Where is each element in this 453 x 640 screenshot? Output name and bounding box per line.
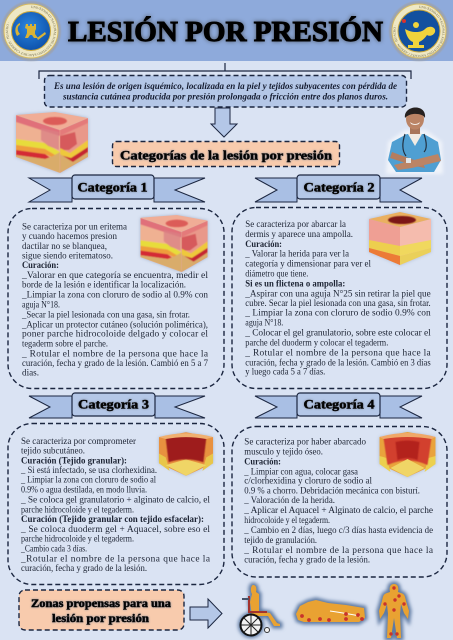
icon: skin lesion illustration	[15, 112, 89, 174]
text: categoría 3: 0.9% o agua destilada, en modo lluvia.	[21, 486, 147, 496]
ribbon: categoría 4	[255, 393, 422, 418]
text: categoría 2: _ Rotular el nombre de la persona que hace la	[244, 348, 432, 358]
text: categoría 3: parche hidrocoloide y el tegaderm.	[21, 505, 134, 515]
text: categoría 3: Se caracteriza por comprometer	[21, 437, 137, 447]
ribbon: categoría 3	[29, 393, 205, 418]
text: categoría 1	[21, 223, 209, 379]
text: categoría 2: parche del duoderm y colocar el tegaderm.	[245, 338, 388, 348]
icon: standing body with pressure points	[379, 584, 409, 638]
panel: categoría 4	[232, 393, 447, 577]
text: categoría 4: _ Aplicar el Aquacel + Alginato de calcio, el parche	[243, 506, 433, 516]
text: categoría 3: _Rotular el nombre de la persona que hace la	[20, 555, 211, 565]
panel: categoría 2	[232, 175, 447, 388]
ribbon: categoría 2	[255, 175, 422, 202]
text: categoría 1: _Aplicar un protector cutáneo (solución polimérica),	[21, 319, 208, 330]
text: categoría 4: 0.9 % a chorro. Debridación mecánica con bisturí.	[244, 487, 420, 497]
text: categoría 1: _Limpiar la zona con cloruro de sodio al 0.9% con	[21, 290, 208, 300]
logo: university crest: UNIVERSIDAD NACIONAL JOSÉ FAUSTINO SÁNCHEZ CARRIÓN · HUACHO ·	[6, 6, 56, 57]
text: categoría 4: _ Rotular el nombre de la persona que hace la	[243, 546, 434, 556]
categories heading box	[112, 142, 340, 166]
icon: skin category 2	[369, 212, 431, 265]
icon: skin category 4	[380, 432, 436, 477]
text: categoría 4: curación, fecha y grado de la lesión.	[244, 554, 370, 565]
panel: categoría 3	[8, 393, 224, 584]
text: categoría 3: _Cambio cada 3 días.	[20, 544, 87, 554]
text: categoría 1: _Secar la piel lesionada con una gasa, sin frotar.	[21, 310, 190, 321]
callout: zonas propensas: Zonas propensas para una	[31, 598, 171, 610]
callout: zonas propensas	[19, 590, 184, 630]
text: categoría 1: y cuando hacemos presion	[22, 232, 117, 242]
text: categoría 2: categoría y dimensionar para ver el	[245, 260, 371, 270]
text: categoría 4: Se caracteriza por haber abarcado	[244, 438, 366, 448]
text: categoría 3: _ Limpiar la zona con cloruro de sodio al	[20, 476, 156, 486]
text: categoría 4: _ Cambio en 2 días, luego c/3 días hasta evidencia de	[243, 526, 433, 536]
text: categoría 1: dias.	[22, 369, 39, 379]
text: categoría 1: borde de la lesión e identificar la localización.	[22, 279, 186, 290]
dashed box: categoría 2	[232, 208, 447, 388]
text: categoría 2: y luego cada 5 a 7 días.	[245, 368, 325, 378]
text: categoría 2: Se caracteriza por abarcar la	[245, 220, 347, 230]
ribbon: categoría 3: Categoría 3	[78, 396, 150, 412]
header band	[0, 0, 453, 61]
ribbon: categoría 4: Categoría 4	[304, 396, 375, 412]
text: categoría 2: _Aspirar con una aguja N°25 sin retirar la piel que	[244, 288, 431, 299]
arrow: to body zones	[190, 599, 222, 628]
title: LESIÓN POR PRESIÓN	[68, 15, 383, 48]
text: categoría 2: Curación:	[245, 240, 282, 250]
text: categoría 1: Se caracteriza por un eritema	[22, 223, 128, 233]
text: categoría 4: Curación:	[244, 457, 281, 467]
icon: skin category 1	[139, 215, 209, 273]
text: categoría 4	[243, 438, 434, 565]
text: categoría 3: _ Se coloca gel granulatorio + alginato de calcio, el	[20, 496, 210, 506]
text: categoría 1: curación, fecha y grado de la lesión. Cambió en 5 a 7	[22, 358, 208, 369]
text: categoría 4: tejido de granulación.	[244, 536, 317, 546]
text: categoría 2: diámetro que tiene.	[245, 269, 308, 279]
text: categoría 2: Si es un flictena o ampolla:	[245, 279, 345, 289]
definition box: Es una lesión de origen isquémico, localizada en la piel y tejidos subyacentes con pérdida de	[53, 82, 397, 92]
text: categoría 1: tegaderm sobre el parche.	[22, 340, 108, 350]
text: categoría 1: sigue siendo eritematoso.	[22, 251, 113, 261]
text: categoría 2: _ Limpiar la zona con cloruro de sodio 0.9% con	[244, 309, 431, 319]
text: categoría 2: dermis y aparece una ampolla.	[245, 230, 353, 240]
text: categoría 3: tejido subcutáneo.	[21, 447, 85, 457]
text: categoría 4: _ Valoración de la herida.	[243, 496, 335, 506]
text: categoría 4: c/clorhexidina y cloruro de sodio al	[244, 477, 372, 487]
arrow: down to categories	[211, 108, 237, 137]
text: categoría 3: _ Si está infectado, se usa clorhexidina.	[20, 465, 157, 476]
text: categoría 3: curación, fecha y grado de la lesión.	[21, 563, 147, 574]
text: categoría 3: parche hidrocoloide y el tegaderm.	[21, 535, 134, 545]
text: categoría 2: _ Colocar el gel granulatorio, sobre este colocar el	[244, 329, 431, 339]
callout: zonas propensas: lesión por presión	[52, 613, 150, 625]
categories heading box: Categorías de la lesión por presión	[120, 148, 333, 162]
ribbon: categoría 2: Categoría 2	[304, 180, 374, 194]
text: categoría 1: poner parche hidrocoloide delgado y colocar el	[22, 330, 208, 340]
text: categoría 3	[20, 437, 211, 574]
text: categoría 3: Curación (Tejido granular):	[21, 455, 127, 466]
definition box	[44, 76, 406, 107]
text: categoría 2: curación, fecha y grado de la lesión. Cambió en 3 días	[245, 357, 431, 368]
text: categoría 1: _Valorar en que categoría se encuentra, medir el	[21, 271, 208, 281]
text: categoría 2	[244, 220, 432, 378]
dashed box: categoría 3	[8, 424, 224, 584]
dashed box: categoría 1	[8, 208, 224, 388]
icon: nurse	[386, 107, 443, 174]
definition box: sustancia cutánea producida por presión prolongada o fricción entre dos planos duros.	[62, 92, 388, 102]
text: categoría 3: Curación (Tejido granular con tejido esfacelar):	[21, 514, 204, 525]
ribbon: categoría 1	[29, 175, 205, 202]
text: categoría 4: hidrocoloide y el tegaderm.	[244, 516, 330, 526]
text: categoría 4: _ Limpiar con agua, colocar gasa	[243, 467, 359, 477]
text: categoría 1: dactilar no se blanquea,	[22, 242, 107, 252]
text: categoría 3: _ Se coloca duoderm gel + Aquacel, sobre eso el	[20, 525, 210, 535]
text: categoría 2: _ Valorar la herida para ver la	[244, 250, 350, 260]
text: categoría 2: cubre. Secar la piel lesionada con una gasa, sin frotar.	[245, 298, 431, 309]
dashed box: categoría 4	[232, 426, 447, 577]
logo: nursing crest: UNIVERSIDAD NACIONAL JOSÉ FAUSTINO SÁNCHEZ CARRIÓN · HUACHO ·	[393, 6, 445, 58]
text: categoría 4: musculo y tejido óseo.	[244, 448, 323, 458]
icon: person in wheelchair	[238, 585, 280, 638]
text: categoría 1: aguja N°18.	[22, 300, 60, 311]
ribbon: categoría 1: Categoría 1	[78, 180, 148, 194]
text: categoría 2: aguja N°18.	[245, 318, 283, 329]
text: categoría 1: Curación:	[22, 261, 59, 271]
panel: categoría 1	[8, 175, 224, 388]
text: categoría 1: _ Rotular el nombre de la persona que hace la	[21, 349, 209, 359]
icon: skin category 3	[159, 432, 213, 476]
bracket connector	[39, 63, 411, 79]
icon: lying body with pressure points	[296, 600, 365, 622]
